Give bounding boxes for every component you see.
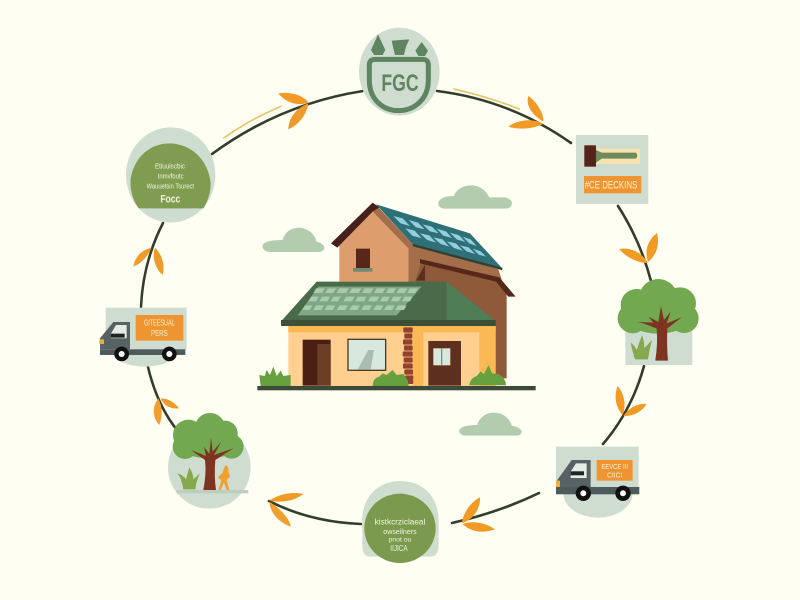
label box: GITEESUAL <box>144 319 175 328</box>
arrow leaves: top left <box>223 93 308 138</box>
node text: Etiuuiscbic <box>155 161 185 170</box>
lower green roof <box>282 282 495 321</box>
arrow leaves: bottom left <box>269 493 303 527</box>
ground line <box>257 386 536 390</box>
brown side wall <box>408 245 507 378</box>
node text <box>147 161 194 206</box>
label box <box>136 315 183 341</box>
upper window <box>353 249 372 272</box>
icon: truck <box>99 322 185 361</box>
roof eave <box>281 320 496 326</box>
node text: IIJICA <box>390 544 408 553</box>
label box: EEVCE III <box>601 464 628 471</box>
icon: brush <box>584 145 637 167</box>
side roof edge <box>420 259 516 297</box>
label box <box>597 460 633 481</box>
upper gable wall <box>339 212 408 282</box>
node text: Focc <box>160 194 180 206</box>
node text: owseilners <box>383 527 417 536</box>
cloud: left <box>263 228 324 252</box>
tree crown <box>173 413 244 459</box>
arrow leaves: left <box>133 248 164 275</box>
label box: CIICI <box>607 473 622 480</box>
node: right tree <box>618 279 699 365</box>
front window <box>348 339 386 370</box>
left doorway <box>303 340 331 386</box>
node: bottom text circle <box>362 481 439 563</box>
node: left text circle <box>126 127 215 223</box>
grass <box>177 467 200 489</box>
shrubs <box>259 365 506 386</box>
node: delivery truck right <box>556 447 639 518</box>
tree crown <box>618 279 699 334</box>
node text: Wauuetsin Tsurect <box>147 181 194 190</box>
grass <box>631 335 652 359</box>
brick column <box>403 327 413 384</box>
lower house wall <box>288 326 496 386</box>
arrow leaves: lower left <box>154 398 179 425</box>
central house <box>257 203 536 390</box>
icon: trees and building <box>371 34 428 56</box>
tree trunk <box>191 437 233 490</box>
solar roof <box>376 204 502 269</box>
front door <box>428 341 461 386</box>
node: tree with person <box>168 413 251 509</box>
node: FGC badge <box>359 28 440 116</box>
cloud: bottom <box>459 413 522 436</box>
node: brush panel <box>576 135 648 204</box>
label box: PERS <box>151 329 168 338</box>
node text <box>375 518 426 553</box>
label box: #CE DECKINS <box>585 180 637 192</box>
icon: truck <box>556 460 639 501</box>
arrow leaves: top right <box>453 89 543 129</box>
arrow leaves: right lower <box>616 386 647 416</box>
arrow leaves: right upper <box>619 233 658 263</box>
icon: person <box>218 465 230 490</box>
node text: kistkcrziclaeal <box>375 518 426 527</box>
node: delivery truck left <box>99 308 187 367</box>
node text: pnot ou <box>389 538 411 544</box>
arrow leaves: bottom right <box>462 497 495 532</box>
tree trunk <box>637 306 682 361</box>
node text: Inmvfoutc <box>158 171 184 180</box>
cloud: top right <box>438 185 512 209</box>
gable roof edge <box>331 203 379 248</box>
badge label: FGC <box>381 70 419 97</box>
lifecycle ring segments <box>141 91 651 524</box>
